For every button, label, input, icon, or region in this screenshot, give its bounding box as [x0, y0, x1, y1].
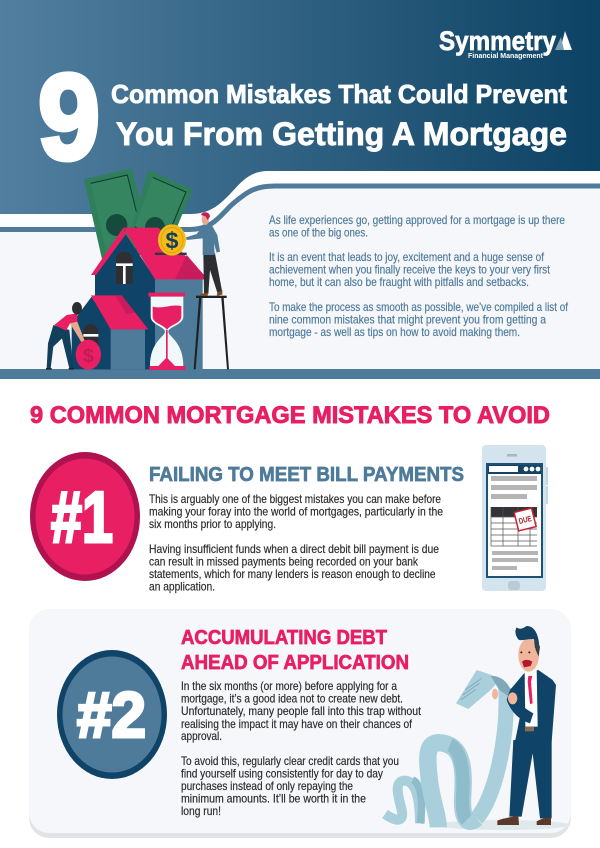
icon: phone with due bill — [482, 445, 548, 591]
mistake 1 heading: FAILING TO MEET BILL PAYMENTS — [149, 464, 464, 486]
big number 9: 9 — [38, 49, 100, 185]
intro text — [269, 214, 569, 339]
illustration: house, money, people — [46, 168, 229, 370]
title — [111, 79, 567, 152]
header banner — [0, 0, 600, 214]
long receipt — [385, 670, 514, 827]
mistake 1 body: This is arguably one of the biggest mistakes you can make before — [149, 493, 441, 506]
mistake 2 body: In the six months (or more) before applying for a — [181, 680, 397, 693]
icon: hourglass — [148, 293, 185, 370]
mistake 1 body: Having insufficient funds when a direct debit bill payment is due — [149, 543, 439, 556]
figure: woman with coin: $ — [83, 346, 94, 367]
mistake 2 body: Unfortunately, many people fall into this trap without — [181, 705, 422, 718]
mistake 2 body: minimum amounts. It’ll be worth it in the — [181, 792, 366, 806]
section heading: 9 COMMON MORTGAGE MISTAKES TO AVOID — [30, 402, 550, 429]
mistake 2 body — [181, 680, 422, 818]
intro text: achievement when you finally receive the keys to your very first — [269, 264, 551, 276]
mistake 2 badge — [57, 650, 167, 779]
mistake 2 body: long run! — [181, 805, 221, 818]
footer bar of intro panel — [0, 369, 600, 379]
icon: phone with due bill: DUE — [518, 514, 533, 526]
mistake 2 body: realising the impact it may have on their chances of — [181, 718, 413, 731]
figure: man placing coin — [186, 212, 222, 296]
mistake 1 body: six months prior to applying. — [149, 518, 276, 531]
mistake 1 body: can result in missed payments being recorded on your bank — [149, 556, 418, 568]
mistake 1 badge — [30, 452, 140, 581]
mistake 1 body — [149, 493, 443, 594]
mistake 2 heading: ACCUMULATING DEBT — [181, 627, 387, 649]
mistake 2 heading — [181, 627, 409, 674]
title: You From Getting A Mortgage — [116, 116, 567, 152]
mistake 2 body: purchases instead of only repaying the — [181, 780, 353, 793]
icon: gold coin: $ — [166, 228, 179, 254]
icon: small house — [72, 295, 148, 369]
mistake 1 body: statements, which for many lenders is reason enough to decline — [149, 568, 436, 581]
mistake 2 body: approval. — [181, 730, 222, 743]
mistake 1 body: an application. — [149, 580, 215, 594]
icon: gold coin — [155, 224, 187, 256]
ground shadow — [437, 820, 570, 830]
mistake 1 body: making your foray into the world of mortgages, particularly in the — [149, 506, 443, 518]
logo: Symmetry — [439, 26, 556, 56]
intro text: nine common mistakes that might prevent you from getting a — [269, 314, 546, 326]
mistake 2 body: To avoid this, regularly clear credit cards that you — [181, 755, 399, 768]
intro panel background — [0, 186, 600, 369]
intro text: It is an event that leads to joy, excitement and a huge sense of — [269, 251, 545, 264]
mistake 2 badge: #2 — [77, 679, 146, 751]
figure: worried businessman — [492, 626, 556, 825]
mistake 2 body: find yourself using consistently for day to day — [181, 768, 383, 780]
logo: Financial Management — [468, 53, 544, 60]
intro text: as one of the big ones. — [269, 226, 368, 240]
panel: mistake 2 — [29, 609, 571, 838]
icon: banknotes — [84, 168, 193, 265]
figure: woman with coin — [46, 302, 101, 370]
intro text: home, but it can also be fraught with pitfalls and setbacks. — [269, 276, 529, 289]
mistake 1 badge: #1 — [51, 478, 113, 558]
icon: stool — [194, 296, 229, 369]
title: Common Mistakes That Could Prevent — [111, 79, 567, 109]
intro text: mortgage - as well as tips on how to avoid making them. — [269, 326, 520, 339]
mistake 2 heading: AHEAD OF APPLICATION — [181, 652, 409, 674]
illustration: businessman with long bill — [385, 626, 570, 830]
icon: large house — [91, 228, 204, 369]
mistake 2 body: mortgage, it’s a good idea not to create new debt. — [181, 692, 403, 706]
